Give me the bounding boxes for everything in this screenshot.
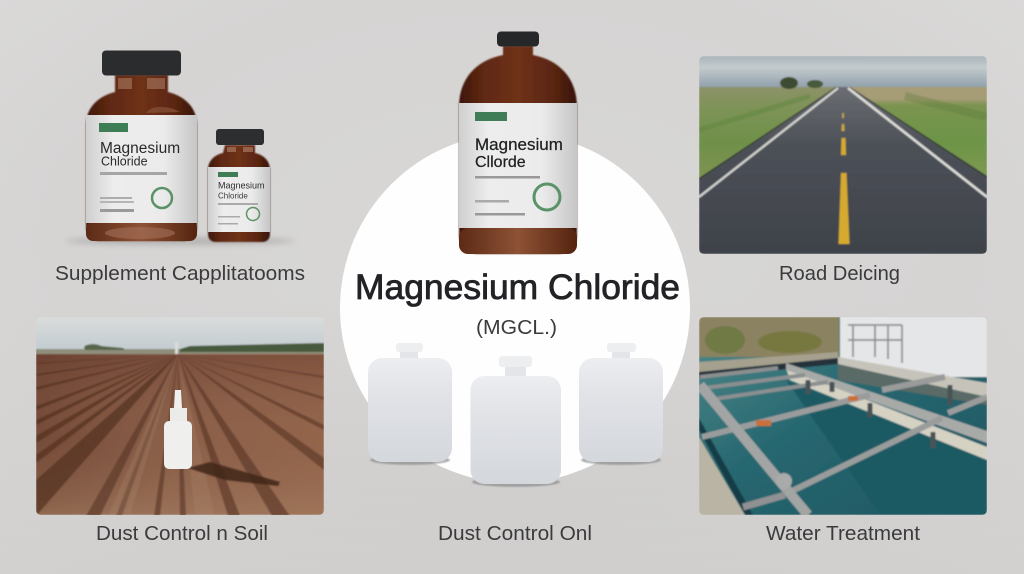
icon: small white bottle (164, 390, 280, 486)
icon: left white container (368, 343, 452, 465)
icon: large supplement bottle: Chloride (101, 154, 148, 168)
panel: road photo (699, 56, 987, 254)
icon: central amber bottle: Cllorde (475, 154, 526, 171)
caption: road deicing: Road Deicing (779, 262, 900, 285)
icon: small supplement bottle: Magnesium (218, 180, 265, 190)
icon: central amber bottle: Magnesium (475, 135, 563, 154)
panel: water treatment photo (699, 317, 987, 515)
title: Magnesium Chloride (355, 267, 680, 307)
caption: dust control soil: Dust Control n Soil (96, 522, 268, 545)
icon: small supplement bottle: Chloride (218, 192, 248, 200)
icons: white containers (368, 343, 663, 487)
panel: supplement bottles (65, 50, 295, 245)
caption: water treatment: Water Treatment (766, 522, 920, 545)
central white circle (340, 133, 690, 483)
panel: soil photo (36, 317, 324, 516)
icon: small supplement bottle (208, 129, 270, 242)
icon: central amber bottle (459, 32, 577, 254)
subtitle: (MGCL.) (476, 316, 557, 339)
icon: right white container (579, 343, 663, 465)
icon: middle white container (470, 356, 561, 487)
heading: supplement caption: Supplement Capplitatooms (55, 262, 305, 285)
icon: large supplement bottle: Magnesium (100, 140, 180, 157)
icon: large supplement bottle (86, 50, 197, 241)
caption: dust control oil: Dust Control Onl (438, 522, 592, 545)
